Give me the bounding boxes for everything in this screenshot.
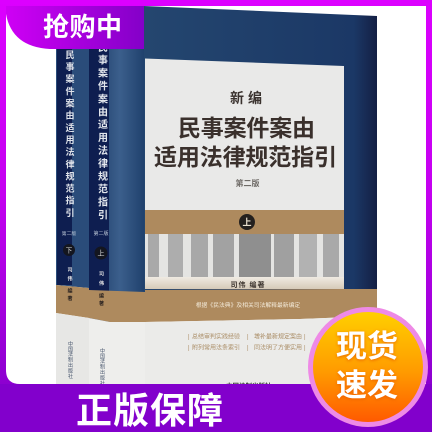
book: upper volume spine xyxy=(89,40,145,387)
subtitle on tan band: 根据《民法典》及相关司法解释最新编定 xyxy=(196,301,300,309)
tab text: 抢购中 xyxy=(43,12,122,42)
badge text glow: 现货 xyxy=(336,330,398,365)
stock badge xyxy=(308,307,428,427)
feature bullets: | xyxy=(247,346,249,352)
tan band, lower volume xyxy=(56,285,89,318)
bottom banner xyxy=(0,384,432,432)
white base, lower volume xyxy=(56,313,89,384)
book: front cover xyxy=(144,6,377,292)
feature bullets: 同法明了方便实用 xyxy=(254,344,302,352)
spine title: 民事案件案由适用法律规范指引 xyxy=(96,42,108,223)
volume badge 上: 上 xyxy=(242,216,252,228)
banner text: 正版保障 xyxy=(76,390,223,431)
feature bullets: | xyxy=(188,334,190,340)
feature bullets: 增补最新规定案由 xyxy=(254,332,302,340)
feature bullets: | xyxy=(188,346,190,352)
window photo strip xyxy=(145,234,344,277)
lower tan band of front cover xyxy=(145,289,377,322)
main title line 1: 民事案件案由 xyxy=(178,115,315,141)
author suffix, lower volume: 编著 xyxy=(66,287,72,303)
white lower cover xyxy=(145,316,377,384)
publisher, lower volume: 中国法制出版社 xyxy=(67,340,73,380)
feature bullets xyxy=(188,332,306,352)
marble title panel xyxy=(145,58,344,210)
top-left tab xyxy=(6,6,144,49)
badge text glow xyxy=(336,330,398,404)
badge text: 速发 xyxy=(336,368,398,403)
author: 司伟 xyxy=(98,271,104,290)
volume badge 上 xyxy=(239,214,255,230)
tan band, spine xyxy=(89,290,145,322)
volume mark 上 xyxy=(94,246,108,260)
feature bullets: 附列常用法条索引 xyxy=(192,344,240,352)
badge text glow: 速发 xyxy=(336,369,398,404)
tan volume band xyxy=(145,210,344,234)
author suffix: 编著 xyxy=(98,292,104,308)
volume mark 下 xyxy=(63,244,75,256)
publisher: 中国法制出版社 xyxy=(99,347,105,387)
publisher: 中国法制出版社 xyxy=(226,381,272,390)
edition label: 第二版 xyxy=(236,178,260,188)
white base, spine xyxy=(89,318,145,384)
spine title, lower volume: 民事案件案由适用法律规范指引 xyxy=(64,50,74,220)
badge text: 现货 xyxy=(336,329,398,364)
feature bullets: | xyxy=(247,334,249,340)
series title: 新编 xyxy=(230,90,266,106)
author, lower volume: 司伟 xyxy=(66,267,72,285)
edition: 第二版 xyxy=(93,230,109,237)
author band xyxy=(145,277,344,289)
volume mark 下: 下 xyxy=(66,246,73,254)
badge text xyxy=(336,329,398,403)
main title line 2: 适用法律规范指引 xyxy=(154,144,337,170)
book: lower volume (back) xyxy=(56,40,89,384)
feature bullets: 总结审判实践经验 xyxy=(192,332,240,340)
feature bullets: | xyxy=(304,334,306,340)
author name: 司伟 编著 xyxy=(231,280,265,289)
volume mark 上: 上 xyxy=(98,248,104,258)
edition, lower volume: 第二版 xyxy=(62,230,76,237)
feature bullets: | xyxy=(304,346,306,352)
